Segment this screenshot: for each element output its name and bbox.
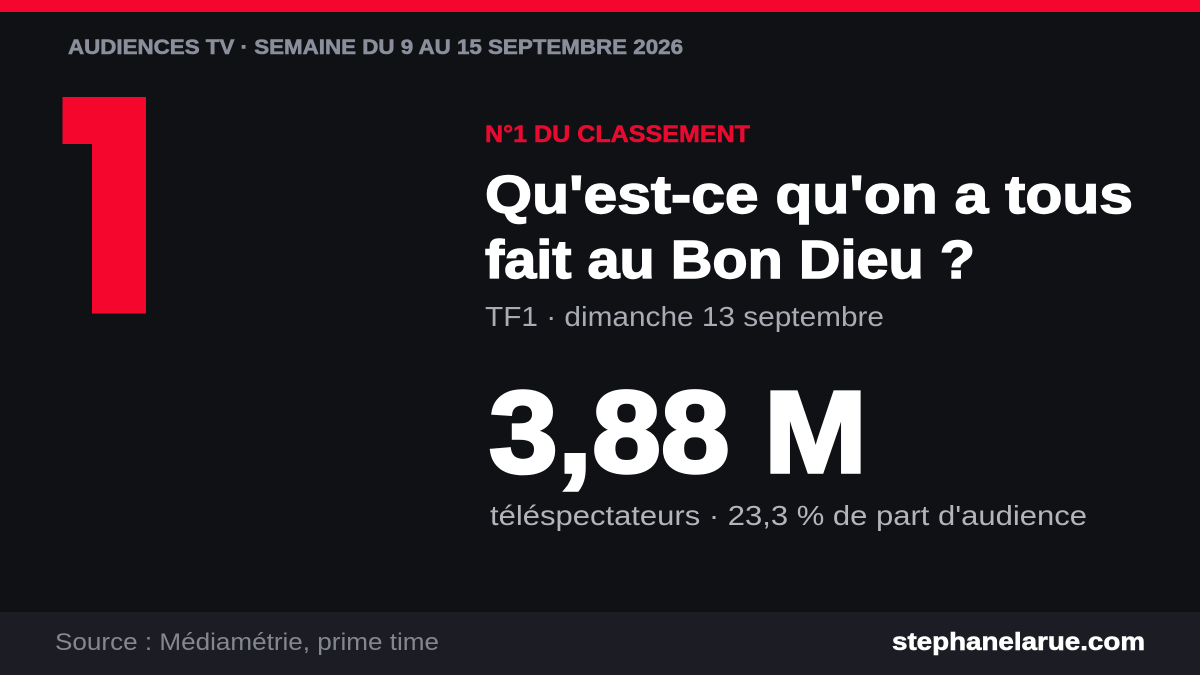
website: stephanelarue.com (892, 628, 1145, 656)
panel: top programme (485, 121, 1133, 531)
source: Source : Médiamétrie, prime time (55, 629, 439, 656)
footer band (0, 612, 1200, 675)
programme title: fait au Bon Dieu ? (485, 230, 975, 290)
programme title (485, 165, 1133, 290)
top accent bar (0, 0, 1200, 12)
audience caption: téléspectateurs · 23,3 % de part d'audience (490, 500, 1087, 531)
audience figure: 3,88 M (489, 367, 867, 497)
channel and date: TF1 · dimanche 13 septembre (485, 301, 884, 332)
programme title: Qu'est-ce qu'on a tous (485, 165, 1133, 225)
rank label: N°1 DU CLASSEMENT (485, 121, 750, 148)
rank number: 1 (20, 41, 187, 377)
header: week of audiences: AUDIENCES TV · SEMAINE DU 9 AU 15 SEPTEMBRE 2026 (68, 36, 683, 59)
